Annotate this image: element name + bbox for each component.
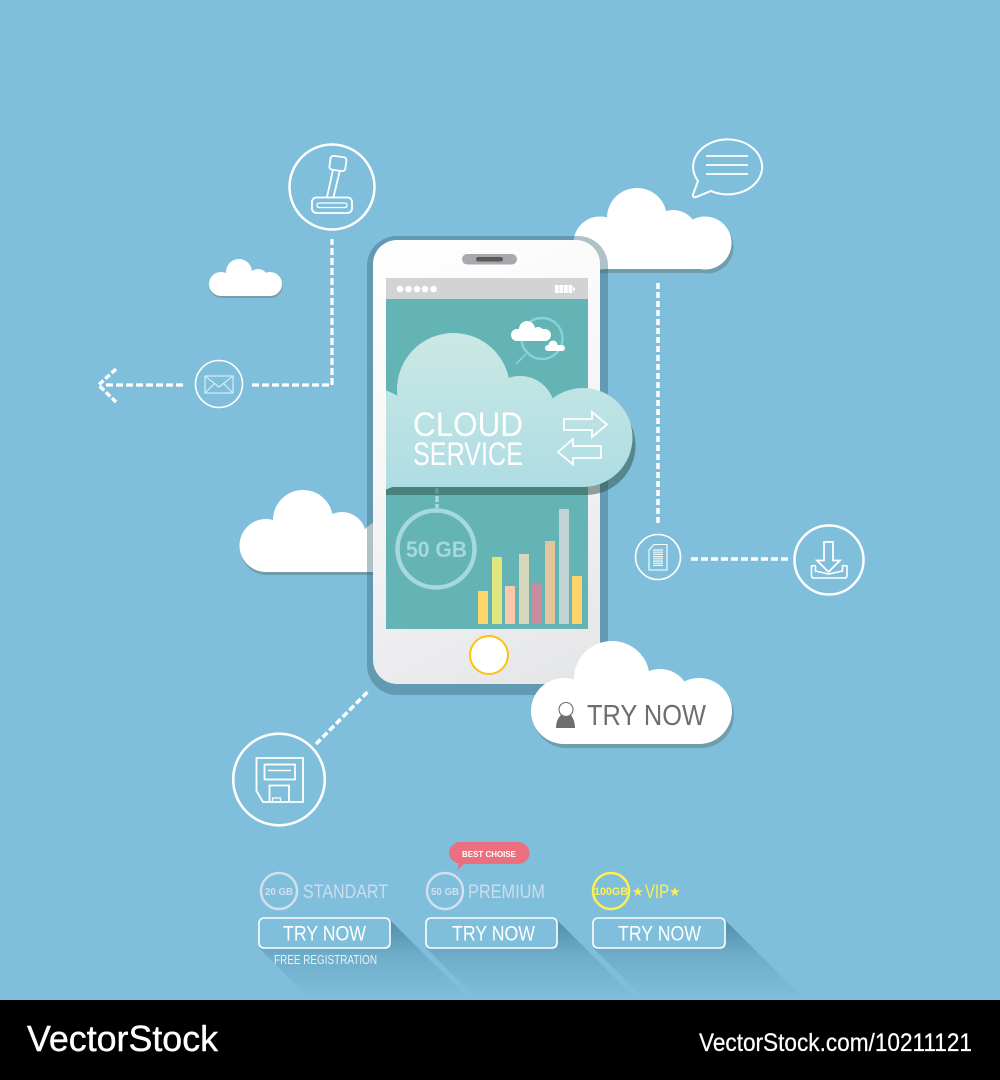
status bar — [386, 278, 588, 299]
phone — [367, 236, 608, 695]
footer bar: VectorStock — [27, 1018, 219, 1059]
cloud service big cloud — [386, 333, 636, 495]
arrow: dashed left — [98, 369, 183, 402]
home button — [470, 636, 508, 674]
plan: vip: 100GB — [594, 886, 628, 898]
connector: cloud to document — [656, 283, 660, 523]
cloud: middle left — [240, 490, 412, 575]
footer bar — [0, 1000, 1000, 1080]
phone shadow — [367, 236, 608, 695]
magnifier with mini clouds — [511, 318, 565, 364]
arrows: exchange — [558, 412, 607, 464]
screen — [386, 299, 588, 629]
plan: vip: VIP — [645, 882, 669, 903]
bar chart — [478, 509, 582, 624]
icon: person — [556, 702, 575, 728]
plan: standart — [259, 873, 470, 1000]
plan: standart: STANDART — [303, 882, 388, 903]
heading: CLOUD — [413, 406, 523, 444]
heading: SERVICE — [413, 436, 523, 472]
connector: phone to floppy — [316, 692, 368, 744]
icon: document in circle — [636, 534, 680, 580]
plan: vip — [593, 873, 805, 1000]
speaker — [462, 254, 517, 264]
plan: premium: TRY NOW — [452, 922, 535, 946]
heading — [413, 406, 523, 472]
badge: best choise: BEST CHOISE — [462, 849, 516, 859]
storage circle 50 GB — [398, 488, 474, 588]
icon: envelope in circle — [196, 360, 242, 408]
plan: premium: PREMIUM — [468, 882, 545, 903]
icon: speech bubble — [693, 139, 762, 197]
badge: best choise — [449, 842, 530, 870]
phone body — [373, 240, 600, 684]
icon: lever in circle — [290, 144, 374, 230]
plan: standart: TRY NOW — [283, 922, 366, 946]
icon: floppy disk in circle — [233, 734, 325, 825]
plan: standart: 20 GB — [265, 886, 293, 898]
cloud: top right — [574, 188, 734, 274]
plan: standart: FREE REGISTRATION — [274, 953, 377, 967]
plan: vip: ★ — [632, 884, 644, 899]
icon: download in circle — [794, 526, 864, 594]
cloud: try now — [531, 641, 734, 748]
connector: lever to mail — [252, 239, 332, 385]
try now label: TRY NOW — [587, 700, 707, 732]
plan: premium — [426, 842, 637, 1000]
plan: vip: TRY NOW — [618, 922, 701, 946]
storage circle 50 GB: 50 GB — [406, 537, 467, 562]
footer bar: VectorStock.com/10211121 — [699, 1029, 972, 1057]
plan: vip: ★ — [669, 884, 681, 899]
cloud: small left — [209, 259, 282, 298]
plan: premium: 50 GB — [431, 886, 459, 898]
connector: document to download — [691, 557, 788, 561]
